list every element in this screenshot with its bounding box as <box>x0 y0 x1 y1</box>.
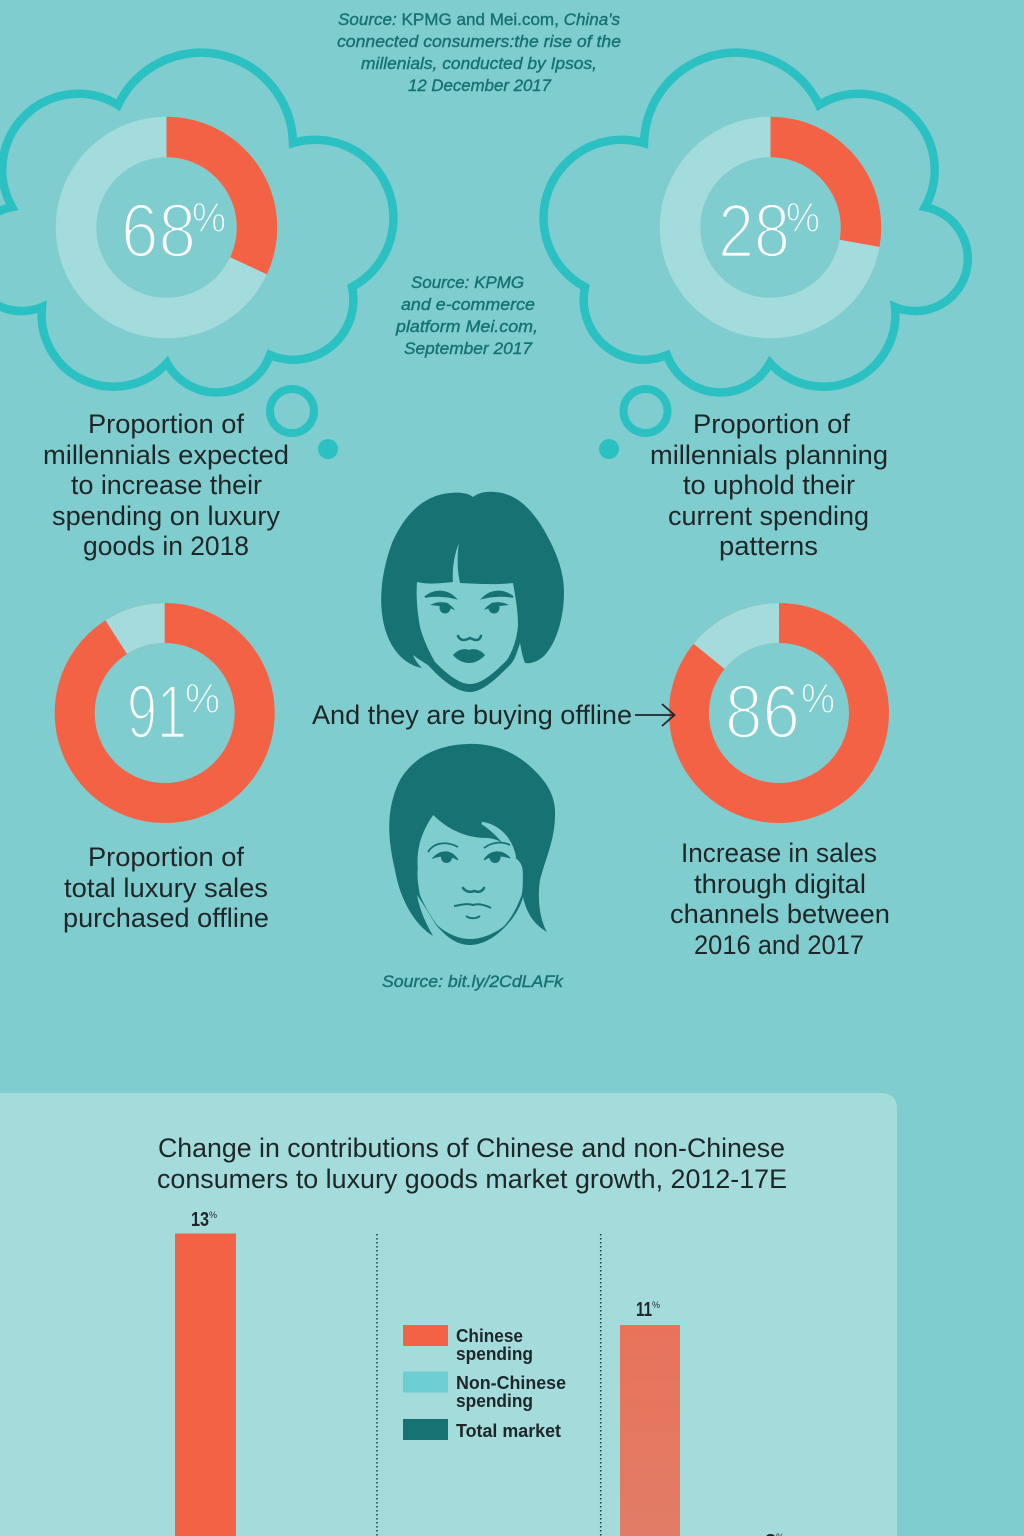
legend label: Non-Chinese spending: Non-Chinese <box>456 1373 566 1393</box>
panel background <box>0 1093 897 1536</box>
swatch: Total market <box>403 1419 448 1440</box>
legend label: Chinese spending: Chinese <box>456 1326 523 1346</box>
hair and chin <box>381 492 564 692</box>
chart title: consumers to luxury goods market growth, 2012-17E <box>157 1164 787 1194</box>
caption: increase through digital channels: channels between <box>670 899 890 929</box>
caption: purchased offline: Proportion of <box>88 842 245 872</box>
caption: increase through digital channels: Increase in sales <box>681 838 877 868</box>
source note: KPMG and Mei.com survey: 12 December 2017 <box>408 76 552 95</box>
value: 13%: % <box>209 1210 217 1220</box>
caption: increase spending in 2018: goods in 2018 <box>83 531 249 561</box>
donut chart: 86% <box>652 586 906 840</box>
caption: increase spending in 2018: Proportion of <box>88 409 245 439</box>
legend label: Chinese spending: spending <box>456 1344 533 1364</box>
face <box>417 815 523 939</box>
icon: woman with bob haircut <box>381 492 564 692</box>
cloud outline left <box>0 53 393 392</box>
donut chart: 91% <box>40 589 289 837</box>
value 86%: 86 <box>725 670 800 755</box>
caption: uphold spending patterns: millennials planning <box>650 440 888 470</box>
lips <box>453 649 485 663</box>
icon: woman with side-swept haircut <box>389 744 555 945</box>
value: 13%: 13 <box>191 1209 209 1231</box>
value 91%: 91 <box>127 670 187 755</box>
caption: uphold spending patterns: current spending <box>668 501 869 531</box>
caption: increase spending in 2018: spending on luxury <box>52 501 280 531</box>
nose <box>458 636 481 640</box>
source note: KPMG and Mei.com survey: Source: KPMG and Mei.com, China's <box>338 10 620 29</box>
face <box>417 543 518 684</box>
thought dot right <box>599 439 619 459</box>
value 68%: % <box>192 194 226 241</box>
chart title <box>157 1133 787 1194</box>
legend label: Non-Chinese spending <box>456 1373 566 1411</box>
value 28%: 28 <box>718 189 790 274</box>
bar: Chinese spending 11% <box>620 1325 680 1536</box>
mouth <box>454 904 491 918</box>
thought ring left <box>270 389 314 433</box>
value 86%: % <box>801 675 835 722</box>
value 68%: 68 <box>121 189 196 274</box>
hair and chin <box>389 744 555 945</box>
thought ring right <box>624 389 668 433</box>
label: and they are buying offline: And they are buying offline <box>312 700 632 730</box>
caption: increase through digital channels: through digital <box>694 869 866 899</box>
thought bubble: 28% planning to uphold spending <box>544 53 968 459</box>
legend label: Chinese spending <box>456 1326 533 1364</box>
thought dot left <box>318 439 338 459</box>
source note: KPMG and Mei.com platform: September 2017 <box>404 339 533 358</box>
legend <box>403 1325 566 1441</box>
arrow to 86% donut <box>635 704 674 726</box>
highlight in fringe <box>482 823 515 858</box>
caption: uphold spending patterns: patterns <box>719 531 818 561</box>
caption: increase through digital channels: 2016 and 2017 <box>694 930 864 960</box>
caption: uphold spending patterns: Proportion of <box>693 409 851 439</box>
swatch: Chinese spending <box>403 1325 448 1346</box>
donut chart: 68% <box>76 137 257 318</box>
source note: KPMG and Mei.com platform: platform Mei.com, <box>395 317 538 336</box>
value: 11%: % <box>652 1300 660 1310</box>
brows and eyes <box>425 591 513 614</box>
value 91%: % <box>185 675 220 722</box>
donut chart: 28% <box>680 137 861 318</box>
caption: purchased offline: total luxury sales <box>64 873 268 903</box>
legend label: Total market: Total market <box>456 1421 561 1441</box>
caption: purchased offline: purchased offline <box>63 903 269 933</box>
bar: Chinese spending 13% <box>175 1234 236 1536</box>
cloud outline right <box>544 53 968 392</box>
caption: increase spending in 2018: millennials expected <box>43 440 289 470</box>
caption: increase spending in 2018: to increase their <box>71 470 262 500</box>
value: 11%: 11 <box>636 1299 652 1321</box>
source note: KPMG and Mei.com survey <box>337 10 621 95</box>
caption: uphold spending patterns: to uphold their <box>683 470 855 500</box>
source note: KPMG and Mei.com platform: and e-commerce <box>401 295 535 314</box>
caption: increase spending in 2018 <box>43 409 289 561</box>
panel: market growth contributions chart <box>0 1093 897 1536</box>
brows and eyes <box>428 843 510 863</box>
caption: purchased offline <box>63 842 269 933</box>
source note: bit.ly link: Source: bit.ly/2CdLAFk <box>382 972 565 991</box>
chart title: Change in contributions of Chinese and non-Chinese <box>158 1133 785 1163</box>
nose <box>463 888 484 892</box>
value 28%: % <box>786 194 820 241</box>
source note: KPMG and Mei.com platform: Source: KPMG <box>411 273 524 292</box>
thought bubble: 68% expected to increase spending <box>0 53 393 459</box>
source note: KPMG and Mei.com platform <box>395 273 538 358</box>
caption: increase through digital channels <box>670 838 890 960</box>
legend label: Non-Chinese spending: spending <box>456 1391 533 1411</box>
caption: uphold spending patterns <box>650 409 888 561</box>
source note: KPMG and Mei.com survey: millenials, conducted by Ipsos, <box>361 54 597 73</box>
source note: KPMG and Mei.com survey: connected consumers:the rise of the <box>337 32 621 51</box>
swatch: Non-Chinese spending <box>403 1372 448 1392</box>
